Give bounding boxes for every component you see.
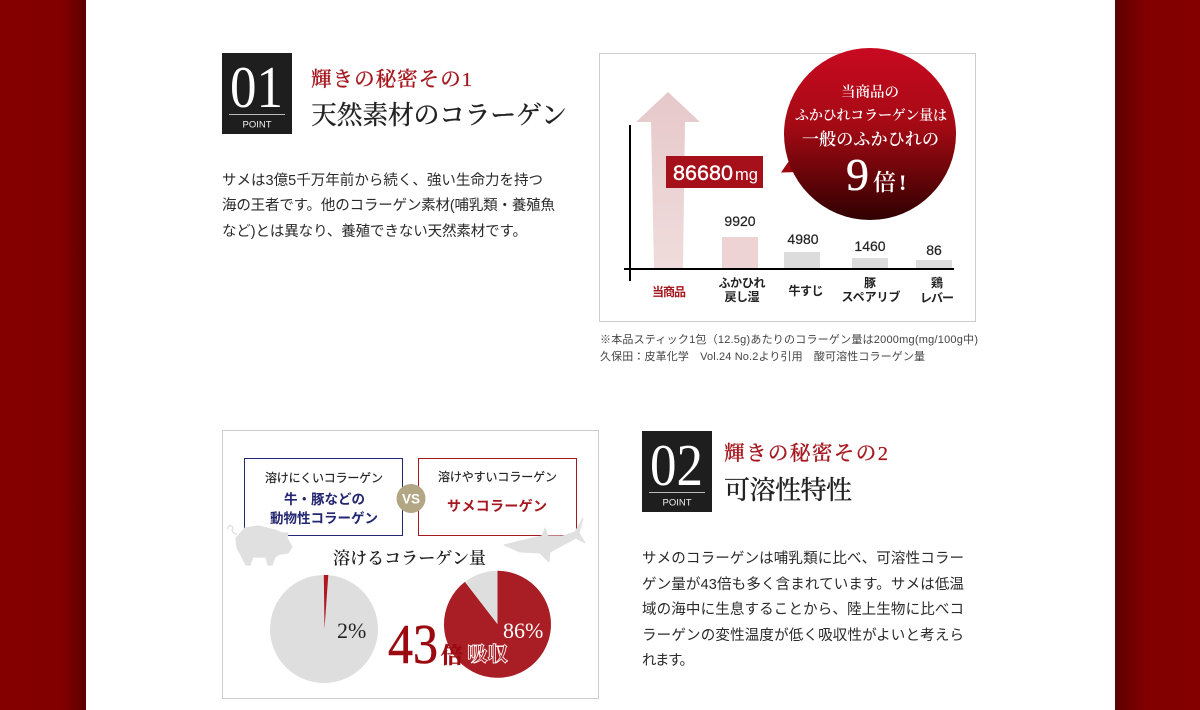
callout: 43 times absorption [388, 614, 508, 676]
value label: 86680mg: 86680 [673, 161, 733, 185]
badge: point 02: 02 [650, 432, 703, 498]
text block: point 2 description: 域の海中に生息することから、陸上生物に比べコ [642, 600, 964, 618]
chart title: 溶けるコラーゲン量 [333, 549, 486, 568]
chart category labels: 戻し湿 [724, 289, 760, 304]
badge: point 01: POINT [242, 120, 272, 130]
value label: 86680mg: mg [735, 166, 758, 184]
box: hard to dissolve collagen [244, 458, 402, 536]
heading: point 2: 可溶性特性 [724, 476, 852, 505]
chart category labels [652, 275, 954, 305]
chart category labels: 鶏 [931, 275, 943, 290]
panel: collagen bar chart [600, 48, 976, 322]
chart category labels: 牛すじ [788, 283, 824, 298]
pie chart: 2 percent: 2% [337, 618, 366, 643]
chart category labels: ふかひれ [718, 276, 766, 290]
text block: point 2 description: れます。 [642, 652, 694, 669]
callout bubble: 9 times [781, 48, 956, 220]
heading: point 1: 輝きの秘密その1 [311, 68, 472, 91]
box: hard to dissolve collagen: 動物性コラーゲン [270, 510, 378, 526]
text block: point 2 description: ゲン量が43倍も多く含まれています。サメは低温 [642, 575, 964, 593]
chart category labels: レバー [920, 291, 954, 305]
callout: 43 times absorption: 43 [388, 614, 438, 676]
callout: 43 times absorption: 吸収 [467, 643, 508, 666]
chart category labels: 豚 [864, 276, 876, 290]
text block: point 1 description: サメは3億5千万年前から続く、強い生命力を持つ [222, 172, 543, 189]
chart category labels: スペアリブ [842, 289, 900, 304]
callout bubble: 9 times: 一般のふかひれの [802, 130, 939, 149]
box: easy to dissolve collagen: サメコラーゲン [447, 498, 547, 514]
box: easy to dissolve collagen: 溶けやすいコラーゲン [438, 470, 557, 484]
icon: VS badge [396, 484, 426, 513]
chart axes [624, 125, 954, 281]
badge: point 01 [222, 53, 292, 134]
footnote: ※本品スティック1包（12.5g)あたりのコラーゲン量は2000mg(mg/100g中) [600, 332, 978, 346]
footnote [600, 332, 978, 363]
box: easy to dissolve collagen [418, 458, 576, 536]
callout: 43 times absorption: 倍 [441, 643, 463, 668]
badge: point 01: 01 [230, 54, 283, 120]
bar: pork spare rib [852, 258, 888, 268]
box: hard to dissolve collagen: 溶けにくいコラーゲン [265, 471, 383, 485]
value label: 86680mg [666, 156, 763, 188]
icon: VS badge: VS [402, 492, 420, 506]
pie chart: 86 percent [444, 571, 551, 678]
heading: point 2: 輝きの秘密その2 [724, 442, 888, 465]
arrow: this product [636, 92, 700, 268]
badge: point 02 [642, 431, 712, 512]
panel: soluble collagen comparison [222, 430, 598, 698]
callout bubble: 9 times: ! [899, 170, 906, 195]
box: hard to dissolve collagen: 牛・豚などの [284, 491, 365, 507]
chart values: 86 [926, 242, 942, 258]
text block: point 1 description: 海の王者です。他のコラーゲン素材(哺乳類・養殖魚 [222, 196, 555, 214]
chart values [724, 213, 942, 258]
chart values: 1460 [854, 238, 886, 254]
pie chart: 2 percent [270, 575, 378, 683]
text block: point 2 description: ラーゲンの変性温度が低く吸収性がよいと考えら [642, 627, 964, 644]
text block: point 1 description [222, 172, 555, 240]
icon: shark [504, 518, 585, 562]
callout bubble: 9 times: 当商品の [841, 83, 899, 101]
heading: point 1: 天然素材のコラーゲン [311, 101, 567, 130]
bar: shark fin [722, 237, 758, 268]
chart category labels: 当商品 [652, 284, 686, 299]
text block: point 2 description: サメのコラーゲンは哺乳類に比べ、可溶性コラー [642, 550, 964, 567]
text block: point 2 description [642, 550, 964, 669]
chart values: 9920 [724, 213, 756, 229]
bar: chicken liver [916, 260, 952, 268]
callout bubble: 9 times: 倍 [873, 170, 896, 195]
footnote: 久保田：皮革化学 Vol.24 No.2より引用 酸可溶性コラーゲン量 [600, 349, 925, 363]
text block: point 1 description: など)とは異なり、養殖できない天然素材です。 [222, 222, 527, 240]
bar: beef tendon [784, 252, 820, 268]
heading: point 2 [724, 442, 888, 505]
icon: pig [228, 526, 292, 565]
badge: point 02: POINT [662, 498, 692, 508]
heading: point 1 [311, 68, 567, 130]
callout bubble: 9 times: ふかひれコラーゲン量は [795, 108, 947, 124]
chart values: 4980 [787, 231, 819, 247]
pie chart: 86 percent: 86% [503, 618, 543, 643]
callout bubble: 9 times: 9 [846, 149, 869, 200]
